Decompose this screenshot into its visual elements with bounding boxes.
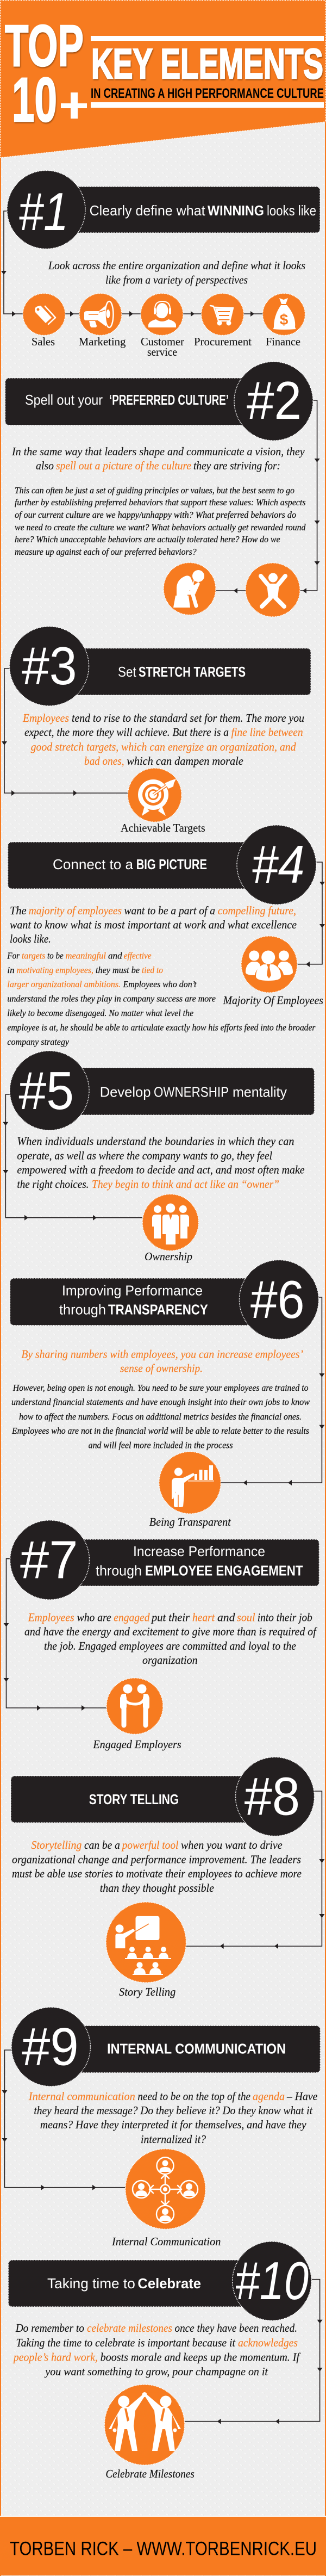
body text 8: organizational change and performance improvement. The leaders: [12, 1853, 301, 1866]
body text 6: understand financial statements and have enough insight into their own jobs to know: [11, 1397, 310, 1407]
body text 3: which can dampen morale: [127, 754, 243, 767]
body text 5: When individuals understand the boundaries in which they can: [17, 1135, 294, 1148]
icon: happy person: [246, 563, 300, 617]
body text 7: soul: [237, 1611, 255, 1624]
flow line 7: [3, 1559, 107, 1711]
body text 5: empowered with a freedom to decide and act, and most often make: [17, 1163, 305, 1176]
section 3: [2, 627, 311, 834]
body text 2: of our current culture are we happy/unhappy with? What preferred behaviors do: [15, 510, 296, 520]
heading bar 10: [8, 2260, 261, 2307]
body text 2: here? Which unacceptable behaviors are actually tolerated here? How do we: [15, 534, 280, 544]
body text 7: heart: [192, 1611, 215, 1624]
number badge 2: [234, 362, 313, 441]
icon: group of employees: [241, 936, 297, 993]
body text 4: understand the roles they play in company success are more: [7, 994, 216, 1004]
label: engaged employers: Engaged Employers: [92, 1738, 181, 1751]
icon: sales: [23, 294, 65, 335]
heading bar 1: WINNING: [208, 202, 264, 219]
section 8: [11, 1757, 324, 1998]
body text 4: effective: [124, 951, 152, 961]
icon: finance: [263, 294, 305, 335]
body text 6: [11, 1383, 310, 1451]
label: customer service: service: [147, 345, 177, 358]
heading bar 7: EMPLOYEE ENGAGEMENT: [145, 1563, 303, 1579]
heading bar 10: Taking time to: [47, 2275, 135, 2292]
body text 3: fine line between: [231, 726, 303, 739]
heading bar 2: Spell out your: [25, 392, 103, 408]
body text 9: – Have: [286, 2090, 317, 2103]
icon: presenting chart: [159, 1452, 221, 1514]
label: ownership: Ownership: [145, 1250, 192, 1263]
label: procurement: Procurement: [194, 335, 252, 348]
icon: ownership team: [142, 1194, 198, 1251]
heading bar 7: Increase Performance: [133, 1543, 265, 1559]
body text 4: For: [7, 951, 20, 961]
heading bar 6: Improving Performance: [62, 1283, 203, 1299]
section 1: [1, 171, 320, 358]
body text 6: Employees who are not in the financial world will be able to relate better to the results: [11, 1426, 309, 1436]
intro text 2: [11, 445, 305, 472]
intro text 4: [10, 904, 297, 945]
body text 4: Employees who don’t: [123, 979, 197, 989]
body text 4: company strategy: [7, 1037, 69, 1047]
icon: story telling classroom: [106, 1902, 186, 1983]
heading bar 9: INTERNAL COMMUNICATION: [107, 2041, 286, 2057]
intro text 2: In the same way that leaders shape and communicate a vision, they: [11, 445, 305, 458]
body text 9: means? Have they interpreted it for themselves, and have they: [40, 2118, 306, 2131]
label: customer service: [141, 335, 184, 358]
number badge 2: #2: [247, 370, 302, 430]
number badge 7: #7: [20, 1530, 78, 1590]
heading bar 3: [65, 648, 311, 695]
heading bar 6: TRANSPARENCY: [108, 1302, 208, 1318]
icon: internal communication: [126, 2149, 205, 2229]
body text 8: when you want to drive: [181, 1838, 283, 1852]
body text 4: tied to: [142, 965, 163, 975]
body text 2: further by establishing preferred behaviors that support these values: Which aspects: [15, 497, 306, 507]
intro text 4: The: [10, 904, 27, 917]
body text 2: This can often be just a set of guiding principles or values, but the best seem to go: [15, 485, 294, 496]
intro text 4: want to know what is most important at work and what excellence: [10, 918, 297, 931]
heading bar 1: looks like: [267, 202, 316, 219]
body text 7: engaged: [114, 1611, 150, 1624]
body text 5: operate, as well as where the company wants to go, they feel: [17, 1149, 272, 1162]
number badge 5: [10, 1051, 89, 1130]
label: internal communication: Internal Communication: [111, 2235, 221, 2248]
heading bar 9: [65, 2026, 320, 2073]
intro text 2: spell out a picture of the culture: [56, 459, 191, 472]
body text 7: the job. Engaged employees are committed and loyal to the: [44, 1639, 296, 1652]
body text 8: powerful tool: [121, 1838, 179, 1852]
section 6: [10, 1260, 324, 1528]
body text 10: Do remember to: [15, 2321, 84, 2334]
section 9: [2, 2007, 320, 2248]
section 5: [3, 1051, 315, 1263]
intro text 6: [21, 1348, 303, 1375]
body text 4: and: [108, 951, 122, 961]
header banner: [0, 0, 326, 158]
heading bar 10: Celebrate: [137, 2275, 201, 2292]
icon: target: [128, 768, 181, 822]
body text 2: measure up against each of our preferred behaviors?: [15, 547, 197, 557]
body text 9: [28, 2090, 317, 2146]
body text 4: likely to become disengaged. No matter what level the: [7, 1008, 193, 1018]
heading bar 5: OWNERSHIP: [154, 1084, 229, 1100]
body text 2: [15, 485, 306, 557]
body text 4: meaningful: [65, 951, 106, 961]
body text 3: [22, 711, 304, 767]
body text 10: Taking the time to celebrate is important because it: [16, 2336, 236, 2349]
heading bar 1: Clearly define what: [90, 202, 205, 219]
number badge 7: [10, 1520, 89, 1600]
body text 10: once they have been reached.: [175, 2321, 297, 2334]
body text 7: and: [217, 1611, 235, 1624]
label: story telling: Story Telling: [119, 1985, 175, 1998]
heading bar 3: STRETCH TARGETS: [139, 664, 246, 680]
flow line 9: [2, 2050, 126, 2190]
body text 7: who are: [77, 1611, 111, 1624]
body text 4: they must be: [96, 965, 140, 975]
number badge 9: [11, 2007, 90, 2086]
body text 5: They begin to think and act like an “owner”: [92, 1178, 279, 1191]
label: sales: Sales: [32, 335, 55, 348]
intro text 4: majority of employees: [29, 904, 122, 917]
body text 8: Storytelling: [31, 1838, 82, 1852]
number badge 1: #1: [18, 182, 68, 242]
body text 3: bad ones,: [84, 754, 124, 767]
section 4: [7, 825, 325, 1047]
body text 9: agenda: [253, 2090, 285, 2103]
body text 10: people’s hard work,: [12, 2351, 98, 2364]
body text 6: However, being open is not enough. You need to be sure your employees are trained to: [12, 1383, 309, 1393]
section 2: [5, 362, 320, 617]
heading bar 4: [8, 842, 263, 889]
body text 9: need to be on the top of the: [137, 2090, 250, 2103]
label: celebrate milestones: Celebrate Milestones: [105, 2467, 195, 2480]
heading bar 5: Develop: [100, 1084, 151, 1100]
number badge 6: #6: [250, 1270, 305, 1329]
body text 4: to be: [47, 951, 64, 961]
number badge 4: [237, 825, 316, 905]
intro text 2: also: [36, 459, 54, 472]
body text 4: [7, 951, 316, 1047]
flow line 5: [3, 1094, 142, 1221]
intro text 4: compelling future,: [218, 904, 296, 917]
body text 3: tend to rise to the standard set for them. The more you: [72, 711, 304, 725]
heading bar 7: [65, 1539, 319, 1586]
body text 10: you want something to grow, pour champagne on it: [44, 2365, 268, 2378]
heading bar 4: BIG PICTURE: [136, 856, 207, 872]
intro text 4: looks like.: [10, 932, 51, 945]
body text 10: celebrate milestones: [87, 2321, 172, 2334]
flow line 8: [186, 1791, 324, 1949]
body text 8: [12, 1838, 302, 1894]
number badge 6: [239, 1260, 318, 1339]
body text 8: can be a: [84, 1838, 120, 1852]
heading bar 5: mentality: [233, 1084, 287, 1100]
body text 3: good stretch targets, which can energize an organization, and: [31, 740, 296, 753]
body text 8: must be able use stories to motivate their employees to achieve more: [12, 1867, 302, 1880]
flow line 6: [221, 1297, 324, 1485]
intro text 1: [48, 259, 305, 287]
title: 10: 10: [12, 65, 57, 135]
body text 7: organization: [142, 1654, 198, 1667]
heading bar 8: STORY TELLING: [89, 1791, 179, 1807]
body text 9: Internal communication: [28, 2090, 135, 2103]
title: top: TOP: [5, 13, 84, 78]
flow line 1: [1, 211, 263, 317]
label: customer service: Customer: [141, 335, 184, 348]
body text 10: [12, 2321, 301, 2378]
intro text 2: they are striving for:: [193, 459, 280, 472]
body text 4: motivating employees,: [17, 965, 93, 975]
title: plus: [61, 92, 87, 119]
heading bar 3: Set: [118, 664, 136, 680]
body text 9: they heard the message? Do they believe it? Do they know what it: [34, 2104, 313, 2117]
number badge 8: #8: [244, 1767, 300, 1826]
body text 7: put their: [151, 1611, 190, 1624]
heading bar 5: [65, 1068, 315, 1115]
icon: procurement: [201, 294, 243, 335]
heading bar 1: [65, 187, 320, 233]
intro text 6: sense of ownership.: [120, 1362, 203, 1375]
body text 5: [17, 1135, 305, 1191]
heading bar 7: through: [96, 1563, 142, 1579]
intro text 1: like from a variety of perspectives: [105, 274, 248, 287]
icon: handshake: [106, 1678, 163, 1734]
heading bar 4: Connect to a: [53, 856, 134, 872]
label: being transparent: Being Transparent: [149, 1515, 231, 1528]
footer: [0, 2516, 326, 2575]
heading bar 8: [11, 1776, 261, 1823]
icon: marketing: [79, 294, 122, 335]
number badge 10: [233, 2241, 311, 2320]
number badge 4: #4: [252, 834, 305, 894]
heading bar 2: ‘PREFERRED CULTURE’: [109, 392, 229, 408]
number badge 9: #9: [22, 2017, 79, 2077]
heading bar 2: [5, 378, 261, 425]
number badge 1: [7, 171, 85, 249]
body text 2: we need to create the culture we want? What behaviors actually get rewarded round: [15, 522, 306, 532]
flow line 2: [216, 400, 320, 593]
body text 3: expect, the more they will achieve. But there is a: [24, 726, 229, 739]
body text 3: Employees: [22, 711, 69, 725]
flow line 3: [2, 668, 128, 796]
heading bar 6: through: [59, 1302, 106, 1318]
body text 5: the right choices.: [17, 1178, 89, 1191]
body text 10: boosts morale and keeps up the momentum. If: [101, 2351, 301, 2364]
body text 8: than they thought possible: [100, 1881, 214, 1894]
body text 9: internalized it?: [141, 2133, 206, 2146]
icon: customer service: [141, 294, 183, 335]
section 7: [3, 1520, 319, 1751]
label: achievable targets: Achievable Targets: [121, 821, 205, 834]
number badge 3: [10, 627, 89, 706]
body text 7: into their job: [258, 1611, 312, 1624]
body text 6: how to affect the numbers. Focus on additional metrics besides the financial ones.: [19, 1411, 302, 1422]
body text 7: Employees: [28, 1611, 74, 1624]
intro text 6: By sharing numbers with employees, you can increase employees’: [21, 1348, 303, 1361]
label: marketing: Marketing: [79, 335, 126, 348]
body text 7: and have the energy and excitement to give more than is required of: [24, 1625, 318, 1638]
body text 4: targets: [22, 951, 46, 961]
intro text 4: want to be a part of a: [124, 904, 215, 917]
body text 6: and will feel more included in the process: [89, 1440, 233, 1451]
flow line 10: [185, 2280, 323, 2424]
label: finance: Finance: [266, 335, 300, 348]
intro text 1: Look across the entire organization and define what it looks: [48, 259, 305, 272]
number badge 10: #10: [235, 2251, 309, 2311]
body text 7: [24, 1611, 318, 1667]
title rule top: [91, 36, 324, 41]
icon: finance: $: [280, 311, 289, 328]
section 10: [8, 2241, 323, 2480]
heading bar 6: [10, 1278, 265, 1326]
number badge 3: #3: [22, 636, 77, 696]
number badge 8: [236, 1757, 314, 1836]
icon: unhappy person: [164, 562, 216, 615]
body text 4: larger organizational ambitions.: [7, 979, 121, 989]
body text 4: in: [7, 965, 15, 975]
number badge 5: #5: [18, 1061, 74, 1120]
title rule bottom: [91, 102, 324, 108]
icon: celebrating high five: [104, 2385, 185, 2465]
body text 10: acknowledges: [238, 2336, 298, 2349]
flow line 4: [297, 862, 325, 967]
